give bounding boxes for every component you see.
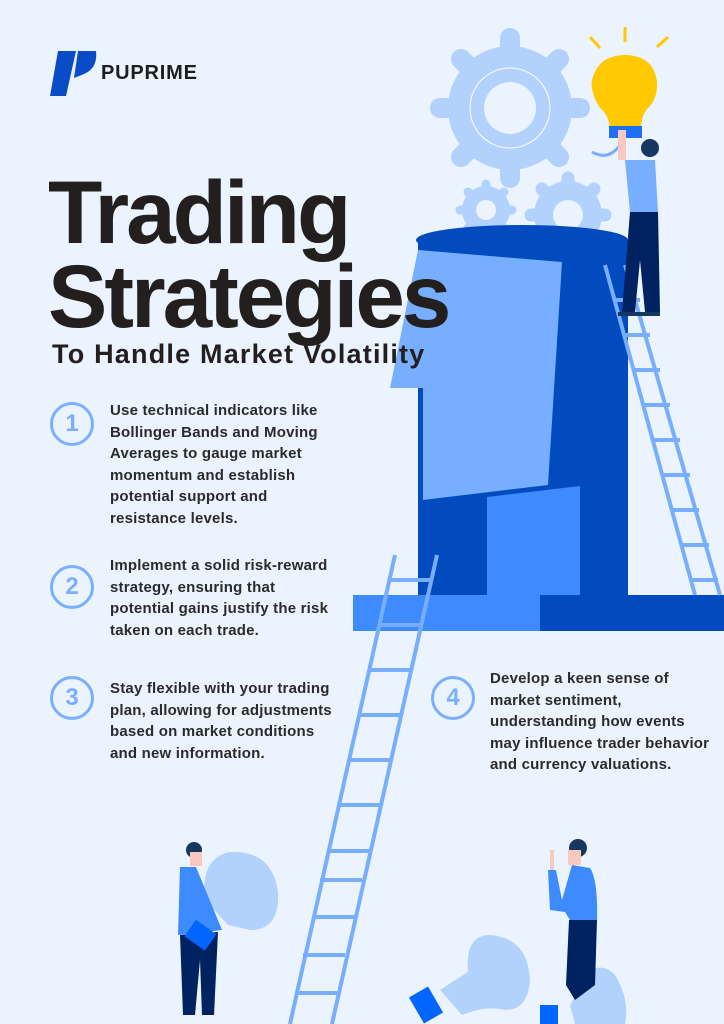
lightbulb: yellow xyxy=(590,27,668,155)
text 1: Bollinger Bands and Moving xyxy=(110,424,318,440)
text 3: Stay flexible with your trading xyxy=(110,680,330,697)
text 3 xyxy=(110,680,332,762)
title xyxy=(48,162,448,346)
number 1 xyxy=(50,402,94,446)
text 1: potential support and xyxy=(110,488,268,505)
person: bottom left with bulb xyxy=(178,842,278,1015)
text 4: understanding how events xyxy=(490,713,685,730)
text 3: and new information. xyxy=(110,744,265,762)
text 3: plan, allowing for adjustments xyxy=(110,702,332,718)
text 2: strategy, ensuring that xyxy=(110,578,275,596)
text 4: market sentiment, xyxy=(490,692,622,708)
number 3 xyxy=(50,676,94,720)
brand name: PUPRIME xyxy=(101,62,198,84)
logo xyxy=(50,51,198,96)
number 1: 1 xyxy=(65,410,79,437)
number 2: 2 xyxy=(65,573,79,600)
gear: small left xyxy=(460,184,512,236)
text 2: potential gains justify the risk xyxy=(110,600,328,617)
text 4: and currency valuations. xyxy=(490,756,672,773)
person: bottom right xyxy=(548,839,597,1000)
number 2 xyxy=(50,565,94,609)
text 2: Implement a solid risk-reward xyxy=(110,557,328,574)
person: top right xyxy=(618,130,660,316)
number 3: 3 xyxy=(65,684,79,711)
text 4: Develop a keen sense of xyxy=(490,670,669,687)
title: Trading xyxy=(48,162,348,262)
item 3 xyxy=(50,676,332,762)
number 4: 4 xyxy=(446,684,460,711)
text 2 xyxy=(110,557,328,638)
item 4 xyxy=(431,670,709,773)
gear: large xyxy=(440,38,580,178)
number 4 xyxy=(431,676,475,720)
text 1: Use technical indicators like xyxy=(110,402,318,419)
text 1 xyxy=(110,402,318,526)
ladder: right xyxy=(605,265,720,595)
text 1: momentum and establish xyxy=(110,466,295,484)
text 2: taken on each trade. xyxy=(110,622,259,638)
icon: logo mark xyxy=(50,51,96,96)
text 1: resistance levels. xyxy=(110,510,238,526)
gear: small right xyxy=(531,178,605,252)
text 4 xyxy=(490,670,709,773)
text 4: may influence trader behavior xyxy=(490,734,709,752)
ladder: left xyxy=(290,555,437,1024)
text 3: based on market conditions xyxy=(110,723,314,740)
head xyxy=(353,225,724,631)
item 1 xyxy=(50,402,318,526)
text 1: Averages to gauge market xyxy=(110,445,302,462)
title: Strategies xyxy=(48,246,448,346)
item 2 xyxy=(50,557,328,638)
subtitle: To Handle Market Volatility xyxy=(52,339,425,369)
lightbulbs: bottom xyxy=(409,935,626,1024)
